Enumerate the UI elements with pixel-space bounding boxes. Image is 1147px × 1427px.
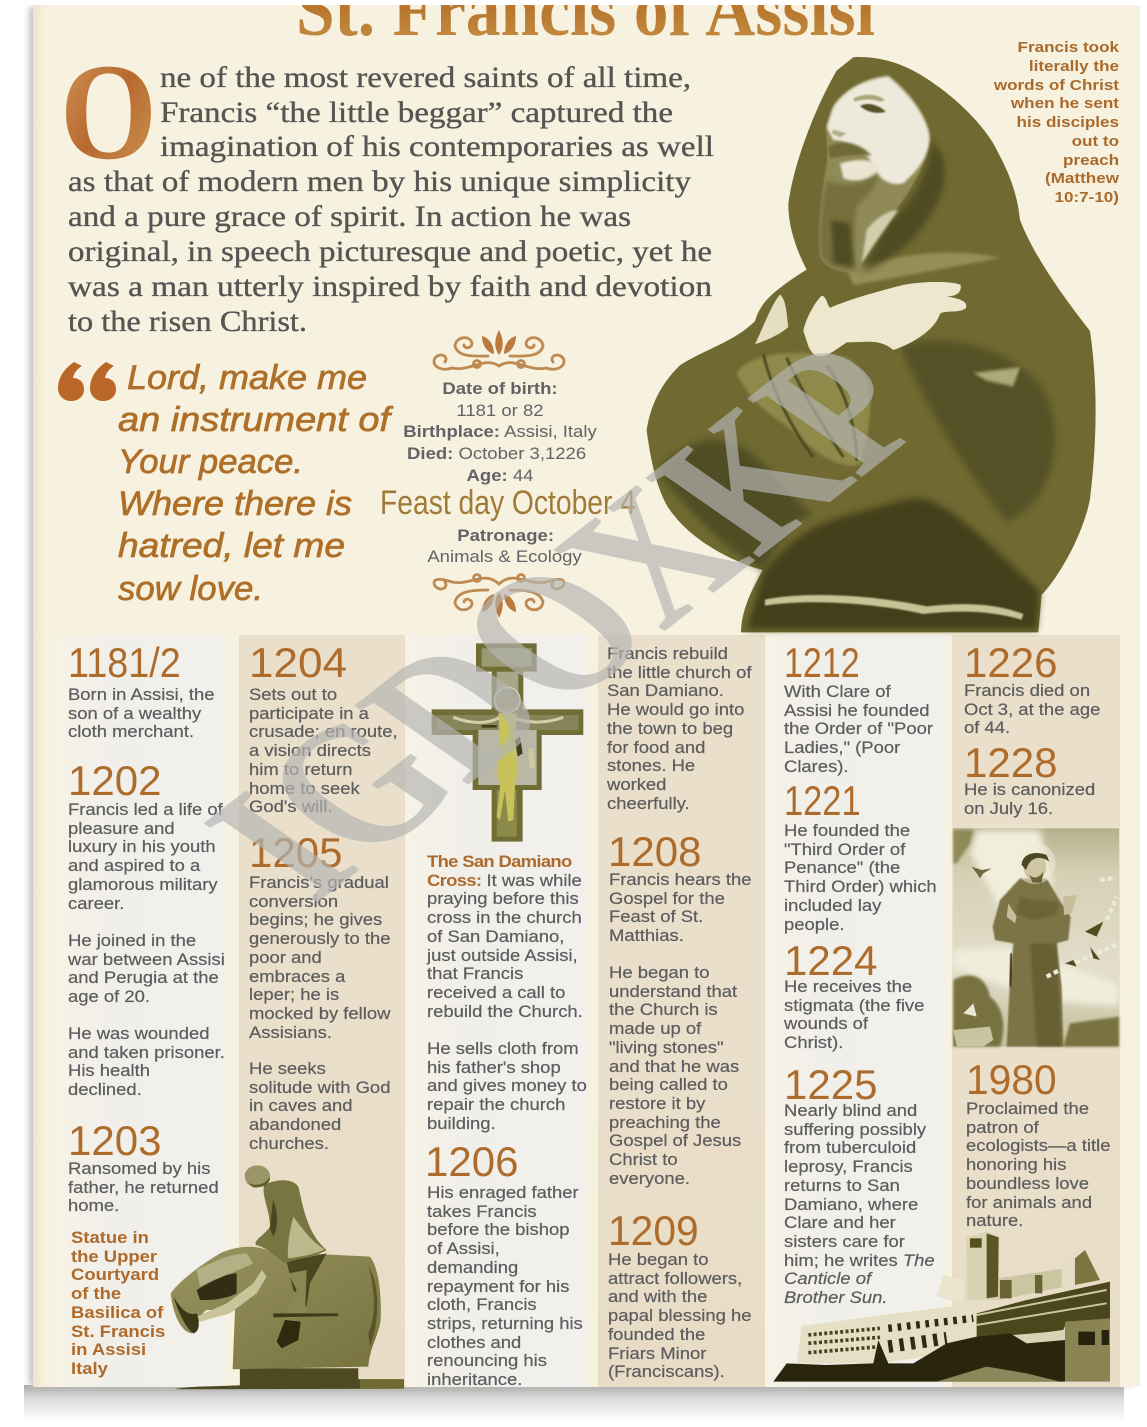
text: and with the [608,1288,707,1306]
text: "living stones" [609,1039,724,1057]
text: him; he writes The [784,1252,935,1270]
text: people. [784,916,845,934]
text: being called to [609,1076,728,1094]
text: founded the [608,1326,705,1344]
intro paragraph: and a pure grace of spirit. In action he was [68,200,631,233]
year 1225: 1225 [784,1061,877,1108]
panel: column 4, 1208-1209 [598,635,765,1387]
quote [118,359,394,608]
text [68,801,223,913]
text: takes Francis [427,1203,537,1221]
text: He is canonized [964,781,1095,799]
text: Assisians. [249,1024,332,1042]
intro paragraph: as that of modern men by his unique simplicity [68,165,691,198]
cross caption text: cross in the church [427,909,582,927]
text [966,1100,1111,1230]
text: for food and [607,739,705,757]
text: conversion [249,893,338,911]
text: participate in a [249,705,369,723]
text [427,1040,587,1133]
image: horse and rider statue [171,1165,404,1389]
year 1206: 1206 [425,1138,518,1185]
panel: column 2, 1204-1205 [239,635,405,1387]
text: Matthias. [609,927,684,945]
cross caption text: of San Damiano, [427,928,564,946]
text: Third Order) which [784,878,937,896]
statue caption: St. Francis [71,1323,165,1341]
text: Friars Minor [608,1345,706,1363]
text: His enraged father [427,1184,579,1202]
text: Sets out to [249,686,337,704]
text [609,871,751,945]
text: before the bishop [427,1221,570,1239]
watermark: IGDOXKP [158,309,976,932]
text: war between Assisi [68,951,225,969]
text: Francis hears the [609,871,751,889]
side note: Francis took [1018,40,1119,56]
text [249,1060,390,1153]
text: leper; he is [249,986,339,1004]
text: restore it by [609,1095,705,1113]
text: He sells cloth from [427,1040,579,1058]
info block: Date of birth: [442,379,558,398]
text: He receives the [784,978,912,996]
text: sisters care for [784,1233,905,1251]
text: He would go into [607,701,744,719]
face and hood opening [819,75,945,273]
text: generously to the [249,930,390,948]
text: the Church is [609,1001,718,1019]
text: the little church of [607,664,752,682]
text: Canticle of [784,1270,871,1288]
text: Oct 3, at the age [964,701,1100,719]
text: son of a wealthy [68,705,201,723]
cross caption text: that Francis [427,965,523,983]
quote: hatred, let me [118,527,345,565]
text [68,686,215,741]
year 1181/2: 1181/2 [68,639,181,686]
info block: Patronage: [457,526,554,545]
text: Francis rebuild [607,645,728,663]
text: His health [68,1062,150,1080]
side note: when he sent [1010,96,1120,112]
text: understand that [609,983,737,1001]
year 1202: 1202 [68,757,161,804]
text: Christ). [784,1034,843,1052]
text: Ransomed by his [68,1160,210,1178]
text: home to seek [249,780,360,798]
year 1205: 1205 [249,829,342,876]
intro paragraph: Francis “the little beggar” captured the [160,96,673,129]
year 1204: 1204 [249,639,347,686]
text: declined. [68,1081,142,1099]
statue caption: Italy [71,1360,108,1378]
cross caption text: Cross: It was while [427,872,582,890]
statue caption: of the [71,1285,121,1303]
text: and that he was [609,1058,739,1076]
top cover clips title at poster edge [0,0,1147,5]
text [68,932,225,1006]
text: and aspired to a [68,857,200,875]
text: the Order of "Poor [784,720,933,738]
text: He founded the [784,822,910,840]
intro paragraph: to the risen Christ. [68,305,307,338]
text: God's will. [249,798,332,816]
side note: his disciples [1017,115,1119,131]
statue caption: Courtyard [71,1266,159,1284]
intro paragraph: original, in speech picturesque and poetic, yet he [68,235,712,268]
text: churches. [249,1135,329,1153]
text: clothes and [427,1334,521,1352]
hands [803,282,966,356]
text: included lay [784,897,881,915]
text: Damiano, where [784,1196,918,1214]
info block: 1181 or 82 [456,401,544,420]
intro paragraph: imagination of his contemporaries as well [160,130,714,163]
text: cloth merchant. [68,723,194,741]
text: his father's shop [427,1059,561,1077]
statue caption: Basilica of [71,1304,163,1322]
panel: column 5, 1212-1225 [765,635,945,1387]
text: With Clare of [784,683,891,701]
year 1980: 1980 [966,1056,1057,1103]
text: luxury in his youth [68,838,216,856]
ornament: bottom [434,574,564,618]
text: Feast of St. [609,908,703,926]
text: strips, returning his [427,1315,583,1333]
text: Francis's gradual [249,874,389,892]
text: "Third Order of [784,841,905,859]
statue caption: in Assisi [71,1341,146,1359]
text: mocked by fellow [249,1005,390,1023]
rope belt [765,595,1023,620]
text: the town to beg [607,720,733,738]
text: pleasure and [68,820,175,838]
text [248,874,391,1042]
text: patron of [966,1119,1039,1137]
text: and taken prisoner. [68,1044,225,1062]
panel: column 6, 1226-1980 [952,635,1120,1387]
text: from tuberculoid [784,1139,916,1157]
text: home. [68,1197,119,1215]
text: Christ to [609,1151,678,1169]
text: on July 16. [964,800,1053,818]
text: Brother Sun. [784,1289,888,1307]
text: San Damiano. [607,682,724,700]
drop cap: O [60,35,157,188]
text: Assisi he founded [784,702,930,720]
text: embraces a [249,968,345,986]
side note: 10:7-10) [1054,190,1119,206]
text [784,683,933,776]
text: crusade; en route, [249,723,398,741]
text: for animals and [966,1194,1092,1212]
image: St. Francis portrait [647,57,1096,632]
text: Gospel of Jesus [609,1132,741,1150]
info block: Birthplace: Assisi, Italy [403,422,597,441]
text [68,1025,225,1099]
text: career. [68,895,124,913]
info block: Died: October 3,1226 [407,444,586,463]
text: made up of [609,1020,701,1038]
text: ecologists—a title [966,1137,1111,1155]
side note: words of Christ [993,78,1120,94]
statue caption: the Upper [71,1248,157,1266]
text [964,781,1095,818]
info block: Age: 44 [467,466,534,485]
text: Proclaimed the [966,1100,1089,1118]
text: and gives money to [427,1077,587,1095]
intro paragraph [60,35,714,338]
cross caption text [426,853,583,1021]
side note: (Matthew [1045,171,1120,187]
text: a vision directs [249,742,371,760]
text: father, he returned [68,1179,219,1197]
statue caption: Statue in [71,1229,149,1247]
text: poor and [249,949,322,967]
text: glamorous military [68,876,218,894]
text: He was wounded [68,1025,209,1043]
quote: an instrument of [118,401,394,439]
cross caption text: praying before this [427,890,579,908]
text [606,645,752,813]
text: begins; he gives [249,911,382,929]
text: renouncing his [427,1352,547,1370]
info block: Animals & Ecology [427,547,582,566]
year 1221: 1221 [784,777,861,824]
text: He joined in the [68,932,196,950]
text: abandoned [249,1116,341,1134]
text: stigmata (the five [784,997,924,1015]
text: Clares). [784,758,849,776]
text: in caves and [249,1097,353,1115]
text [609,964,741,1188]
side note: out to [1072,134,1119,150]
text: Ladies," (Poor [784,739,900,757]
text: worked [607,776,666,794]
quote: sow love. [118,570,263,608]
text: returns to San [784,1177,900,1195]
year 1212: 1212 [784,639,860,686]
year 1209: 1209 [608,1207,699,1254]
cross caption text: just outside Assisi, [427,947,578,965]
cross caption text: rebuild the Church. [427,1003,583,1021]
text: attract followers, [608,1270,742,1288]
text: Gospel for the [609,890,725,908]
text: age of 20. [68,988,150,1006]
text: repayment for his [427,1278,569,1296]
statue caption [71,1229,165,1378]
text: honoring his [966,1156,1066,1174]
text: Born in Assisi, the [68,686,215,704]
year 1203: 1203 [68,1117,161,1164]
text: nature. [966,1212,1023,1230]
intro paragraph: ne of the most revered saints of all time, [160,61,691,94]
quote: Lord, make me [127,359,367,397]
text: of Assisi, [427,1240,500,1258]
text: suffering possibly [784,1121,926,1139]
text: building. [427,1115,496,1133]
text: and Perugia at the [68,969,219,987]
text: papal blessing he [608,1307,752,1325]
text: cloth, Francis [427,1296,537,1314]
text: Nearly blind and [784,1102,917,1120]
year 1208: 1208 [608,828,701,875]
text [427,1184,583,1387]
text: leprosy, Francis [784,1158,913,1176]
text [964,682,1100,737]
cross caption text: received a call to [427,984,565,1002]
text: stones. He [607,757,695,775]
text [784,978,924,1052]
text [784,822,937,934]
text: Francis died on [964,682,1090,700]
text [68,1160,219,1215]
text: repair the church [427,1096,565,1114]
text: him to return [249,761,353,779]
text: of 44. [964,719,1010,737]
year 1228: 1228 [964,739,1057,786]
text: He began to [608,1251,708,1269]
text: Penance" (the [784,859,900,877]
image: St. Francis with birds [953,828,1119,1047]
text [784,1102,935,1307]
quote: Your peace. [118,443,303,481]
image: San Damiano cross [432,643,583,842]
year 1226: 1226 [964,639,1057,686]
icon: quotation mark [58,362,116,401]
text: boundless love [966,1175,1089,1193]
year 1224: 1224 [784,937,877,984]
sleeve folds [737,353,870,466]
text: He seeks [249,1060,326,1078]
panel: column 3, San Damiano Cross and 1206 [405,635,587,1387]
text: (Franciscans). [608,1363,725,1381]
cross caption text: The San Damiano [427,853,572,871]
quote: Where there is [118,485,352,523]
text [249,686,398,816]
panel: column 1, 1181-1203 [57,635,225,1387]
text: cheerfully. [607,795,690,813]
robe highlights [847,253,1000,285]
poster shadow [24,1385,1124,1421]
info block [403,379,597,566]
text: Clare and her [784,1214,896,1232]
text: preaching the [609,1114,721,1132]
text [608,1251,752,1381]
image: basilica of Assisi [773,1232,1110,1382]
side note: literally the [1029,59,1119,75]
text: demanding [427,1259,518,1277]
ornament: top [434,330,564,369]
side note [993,40,1120,206]
text: Francis led a life of [68,801,223,819]
side note: preach [1063,153,1119,169]
intro paragraph: was a man utterly inspired by faith and devotion [68,270,712,303]
text: wounds of [784,1015,868,1033]
feast day: Feast day October 4 [380,484,636,522]
text: solitude with God [249,1079,390,1097]
text: He began to [609,964,709,982]
text: everyone. [609,1170,690,1188]
